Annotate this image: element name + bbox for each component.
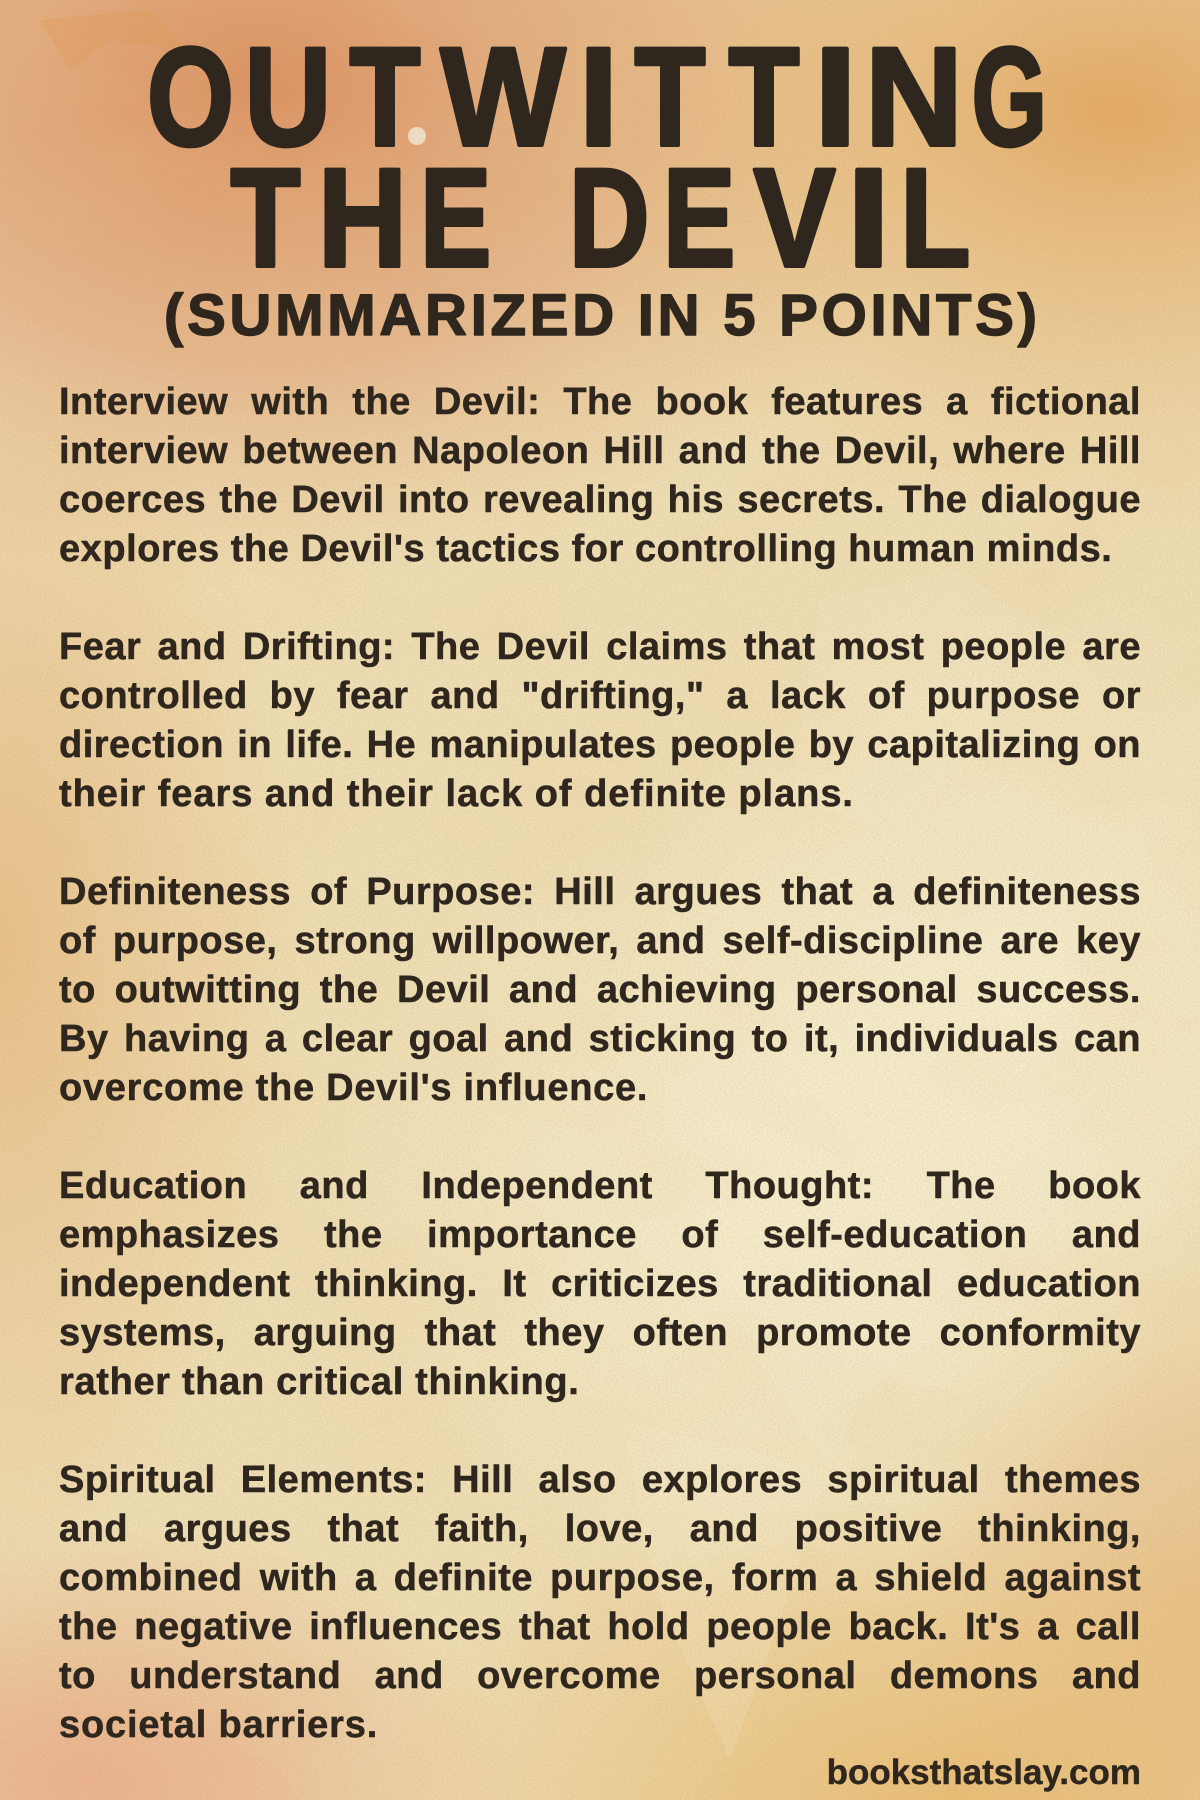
- title line 2: H: [318, 139, 407, 296]
- point 1: interview with the devil: Interview with the Devil: The book features a fictional: [59, 381, 1141, 423]
- point 1: interview with the devil: explores the Devil's tactics for controlling human minds.: [59, 528, 1112, 570]
- point 2: fear and drifting: [59, 626, 1141, 815]
- title line 1: T: [350, 18, 420, 175]
- website credit: booksthatslay.com: [827, 1753, 1141, 1792]
- point 1: interview with the devil: interview between Napoleon Hill and the Devil, where Hill: [59, 430, 1141, 472]
- point 2: fear and drifting: controlled by fear and "drifting," a lack of purpose or: [59, 675, 1141, 717]
- point 5: spiritual elements: Spiritual Elements: Hill also explores spiritual themes: [59, 1459, 1141, 1501]
- title line 2: T: [231, 139, 300, 296]
- title line 2: V: [754, 139, 836, 296]
- point 4: education and independent thought: independent thinking. It criticizes traditional education: [59, 1263, 1141, 1305]
- point 3: definiteness of purpose: overcome the Devil's influence.: [59, 1067, 648, 1109]
- title line 1: I: [579, 18, 618, 175]
- title line 1: O: [147, 18, 234, 175]
- point 4: education and independent thought: emphasizes the importance of self-education and: [59, 1214, 1141, 1256]
- point 3: definiteness of purpose: to outwitting the Devil and achieving personal success.: [59, 969, 1141, 1011]
- point 2: fear and drifting: Fear and Drifting: The Devil claims that most people are: [59, 626, 1141, 668]
- point 4: education and independent thought: rather than critical thinking.: [59, 1361, 580, 1403]
- title line 2: D: [569, 139, 650, 296]
- title block: [147, 18, 1047, 348]
- point 5: spiritual elements: combined with a definite purpose, form a shield against: [59, 1557, 1141, 1599]
- point 1: interview with the devil: coerces the Devil into revealing his secrets. The dialogue: [59, 479, 1141, 521]
- point 5: spiritual elements: societal barriers.: [59, 1704, 378, 1746]
- point 3: definiteness of purpose: By having a clear goal and sticking to it, individuals can: [59, 1018, 1141, 1060]
- point 5: spiritual elements: the negative influences that hold people back. It's a call: [59, 1606, 1141, 1648]
- point 2: fear and drifting: their fears and their lack of definite plans.: [59, 773, 854, 815]
- title line 2: L: [900, 139, 970, 296]
- point 3: definiteness of purpose: [59, 871, 1141, 1109]
- point 5: spiritual elements: and argues that faith, love, and positive thinking,: [59, 1508, 1141, 1550]
- subtitle: (SUMMARIZED IN 5 POINTS): [164, 283, 1037, 348]
- title line 1: W: [440, 18, 566, 175]
- point 4: education and independent thought: systems, arguing that they often promote conformity: [59, 1312, 1141, 1354]
- point 4: education and independent thought: [59, 1165, 1141, 1403]
- title line 1: I: [814, 18, 857, 175]
- point 3: definiteness of purpose: Definiteness of Purpose: Hill argues that a definiteness: [59, 871, 1141, 913]
- title line 2: I: [847, 139, 890, 296]
- title line 1: T: [635, 18, 705, 175]
- title line 2: E: [663, 139, 735, 296]
- title line 1: N: [865, 18, 963, 175]
- title line 2: E: [420, 139, 491, 296]
- point 5: spiritual elements: [59, 1459, 1141, 1746]
- title line 1: G: [972, 18, 1047, 175]
- point 4: education and independent thought: Education and Independent Thought: The book: [59, 1165, 1141, 1207]
- point 2: fear and drifting: direction in life. He manipulates people by capitalizing on: [59, 724, 1141, 766]
- point 3: definiteness of purpose: of purpose, strong willpower, and self-discipline are key: [59, 920, 1141, 962]
- point 5: spiritual elements: to understand and overcome personal demons and: [59, 1655, 1141, 1697]
- point 1: interview with the devil: [59, 381, 1141, 570]
- title line 1: U: [244, 18, 331, 175]
- title line 1: T: [729, 18, 799, 175]
